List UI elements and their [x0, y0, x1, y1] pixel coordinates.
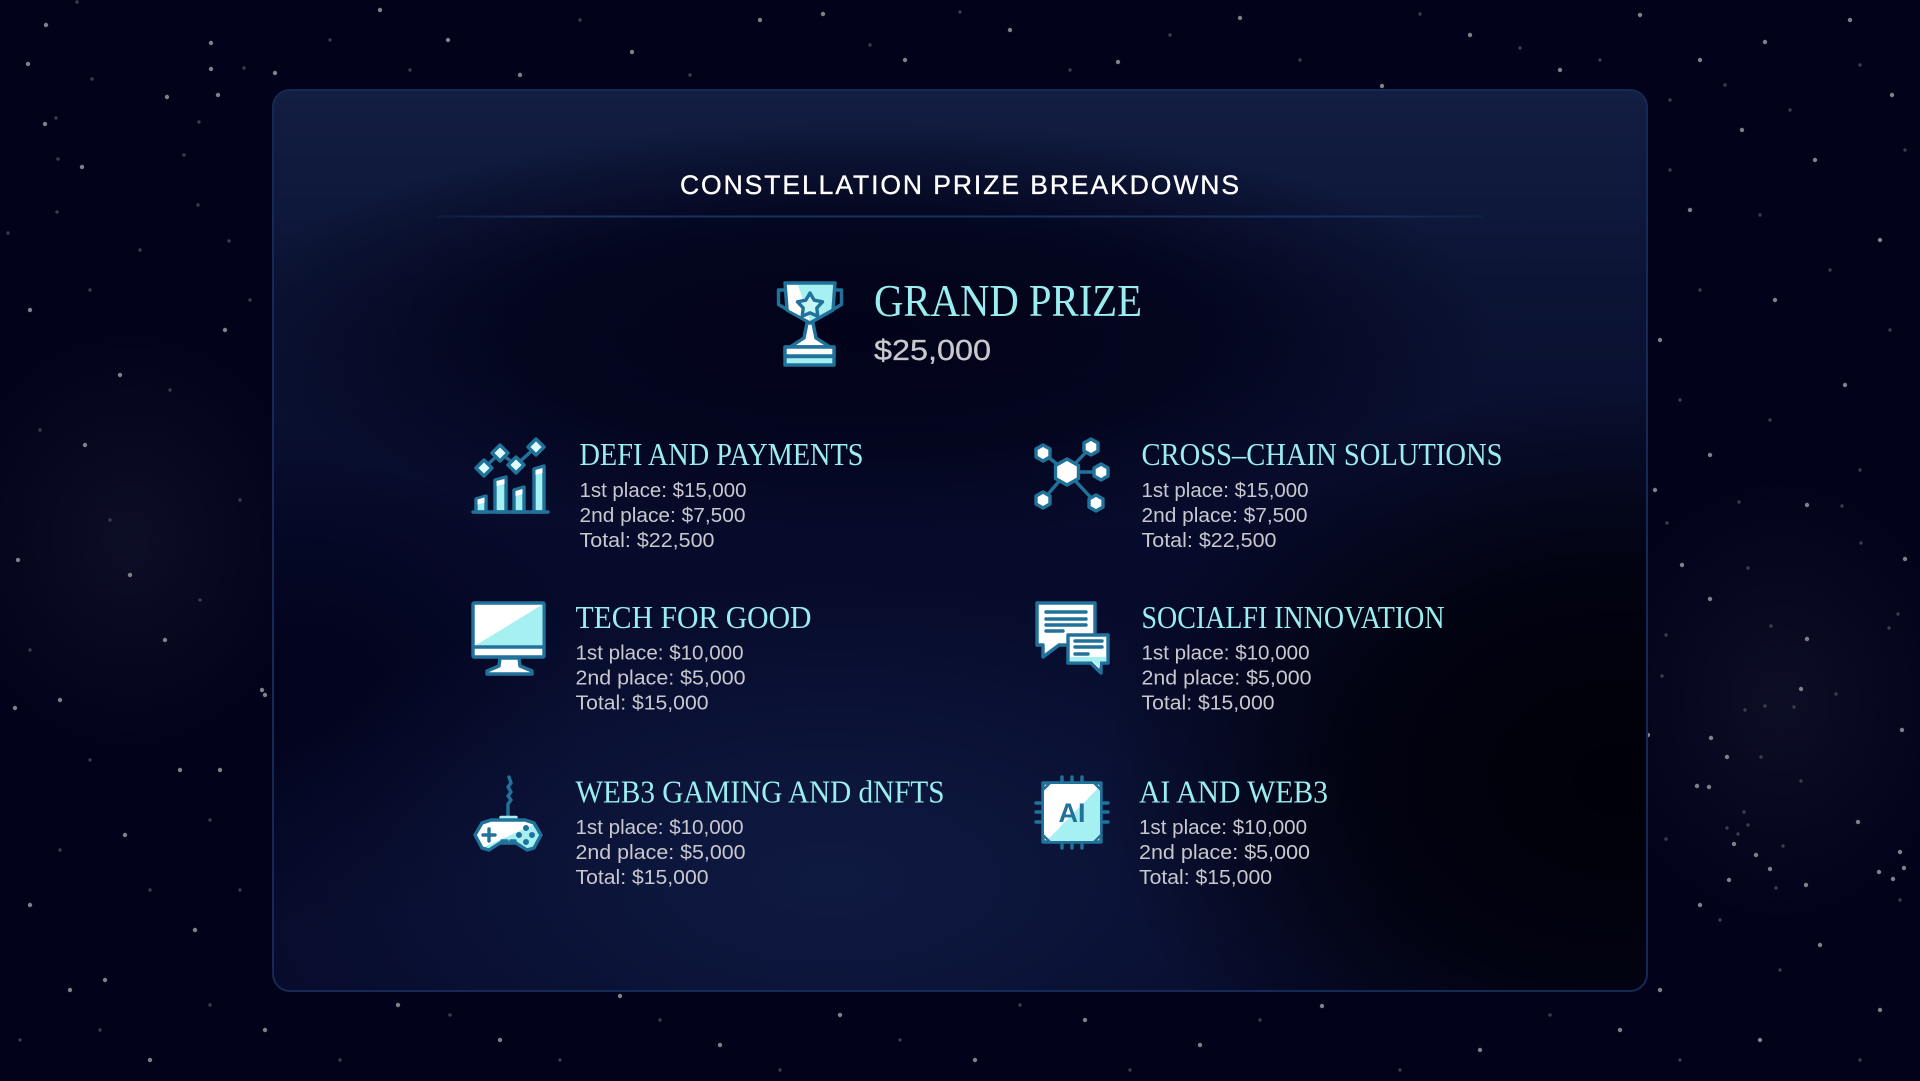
prize: cross-chain solutions — [1036, 436, 1502, 552]
details: 2nd place: $5,000 — [1142, 666, 1312, 690]
icon: AI chip — [1036, 777, 1108, 848]
details: 1st place: $10,000 — [1142, 642, 1310, 664]
details — [1142, 642, 1312, 714]
details: Total: $22,500 — [1142, 529, 1276, 552]
details: 1st place: $10,000 — [576, 816, 744, 839]
details — [1139, 816, 1310, 889]
details: Total: $15,000 — [576, 692, 708, 714]
grand prize block — [778, 276, 1142, 367]
details — [576, 816, 746, 889]
icon: chat bubbles — [1037, 603, 1108, 673]
details: 1st place: $15,000 — [1142, 479, 1308, 502]
details: Total: $22,500 — [580, 529, 714, 552]
prize: web3 gaming and dnfts — [475, 774, 944, 889]
heading: AI AND WEB3 — [1139, 774, 1328, 810]
icon: game controller — [475, 777, 541, 850]
prize: defi and payments — [473, 436, 864, 552]
prize: tech for good — [473, 599, 812, 714]
icon: rising bar chart — [473, 439, 548, 512]
details: 1st place: $10,000 — [576, 642, 744, 664]
details — [576, 642, 746, 714]
title divider — [437, 216, 1483, 218]
icon: trophy — [778, 283, 842, 365]
details: 1st place: $10,000 — [1139, 816, 1307, 839]
heading: CROSS–CHAIN SOLUTIONS — [1142, 436, 1502, 472]
icon label: AI: AI — [1058, 798, 1086, 828]
details: Total: $15,000 — [1139, 866, 1272, 889]
heading: grand prize: GRAND PRIZE — [874, 276, 1142, 326]
heading: SOCIALFI INNOVATION — [1142, 599, 1444, 635]
details: 2nd place: $7,500 — [1142, 504, 1308, 527]
details: 1st place: $15,000 — [580, 479, 746, 502]
icon: network nodes — [1036, 439, 1108, 511]
grand prize amount: $25,000 — [874, 335, 991, 367]
main panel — [273, 90, 1647, 991]
heading: DEFI AND PAYMENTS — [580, 436, 864, 472]
heading: WEB3 GAMING AND dNFTS — [576, 774, 944, 810]
details: Total: $15,000 — [576, 866, 708, 889]
prize: socialfi innovation — [1037, 599, 1444, 714]
details — [1142, 479, 1308, 552]
icon: desktop monitor — [473, 603, 544, 674]
details: 2nd place: $5,000 — [1139, 841, 1310, 864]
details: 2nd place: $5,000 — [576, 841, 746, 864]
details: 2nd place: $5,000 — [576, 666, 746, 690]
details — [580, 479, 746, 552]
details: 2nd place: $7,500 — [580, 504, 746, 527]
details: Total: $15,000 — [1142, 692, 1274, 714]
prize: ai and web3 — [1036, 774, 1328, 889]
heading: TECH FOR GOOD — [576, 599, 812, 635]
panel title: CONSTELLATION PRIZE BREAKDOWNS — [680, 170, 1239, 200]
